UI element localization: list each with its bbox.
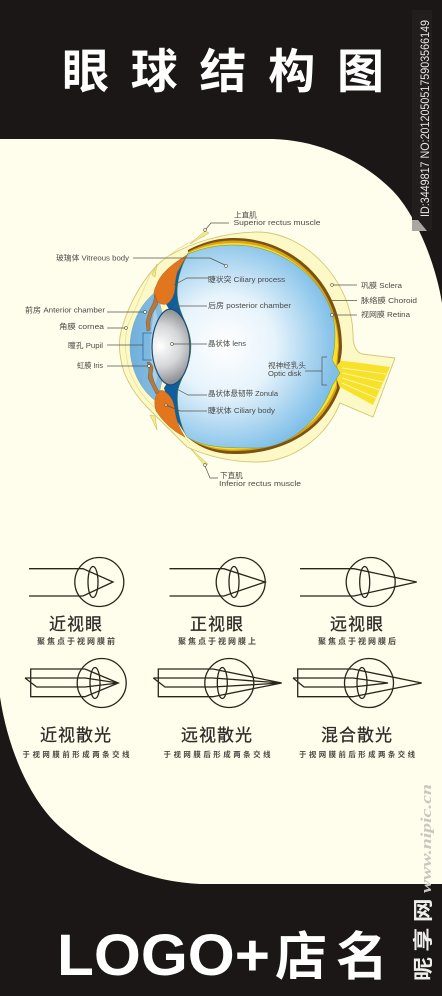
label: myopia: 近视眼	[49, 615, 103, 634]
choroid	[187, 238, 342, 454]
watermark url: www.nipic.cn	[419, 784, 435, 893]
muscles	[150, 231, 209, 466]
label: iris	[77, 360, 150, 370]
watermark id box	[412, 10, 432, 231]
label: myopic astigmatism	[22, 726, 130, 759]
label: normal: 聚焦点于视网膜上	[178, 636, 256, 646]
label: cornea	[59, 321, 127, 331]
sclera	[119, 232, 395, 462]
label: optic disk: Optic disk	[268, 369, 302, 378]
diagram: myopia	[29, 558, 124, 606]
footer logo text: LOGO+	[57, 923, 270, 988]
diagram: hyperopia	[300, 558, 417, 606]
retina yellow	[187, 243, 338, 450]
label: choroid: 脉络膜 Choroid	[361, 295, 417, 305]
label: anterior chamber	[25, 305, 146, 315]
label: optic disk	[268, 360, 322, 378]
label: mixed astigmatism	[299, 726, 416, 759]
label: normal	[178, 615, 256, 646]
label: hyperopia: 远视眼	[330, 615, 384, 634]
label: posterior chamber: 后房 posterior chamber	[208, 300, 291, 310]
cornea	[130, 291, 170, 402]
label: normal: 正视眼	[190, 615, 244, 634]
label: hyperopic astigmatism	[164, 726, 271, 759]
diagram: mixed astigmatism	[293, 658, 422, 708]
label: superior rectus muscle: 上直肌	[234, 210, 257, 220]
label: posterior chamber	[174, 300, 291, 310]
label: inferior rectus muscle	[204, 464, 301, 488]
label: cornea: 角膜 cornea	[59, 321, 105, 331]
label: sclera	[331, 280, 403, 290]
retina gold	[187, 240, 339, 451]
label: myopia	[37, 615, 115, 646]
label: anterior chamber: 前房 Anterior chamber	[25, 305, 105, 315]
label: superior rectus muscle	[204, 210, 320, 231]
optic disk bracket	[322, 357, 327, 385]
label: ciliary process: 睫状突 Ciliary process	[208, 274, 285, 284]
diagram: hyperopic astigmatism	[153, 658, 282, 708]
footer logo text: 店名	[275, 929, 388, 987]
label: lens	[171, 338, 246, 348]
footer logo text	[57, 923, 388, 988]
pupil bracket	[143, 333, 152, 360]
label: superior rectus muscle: Superior rectus muscle	[234, 218, 320, 227]
label: pupil	[68, 340, 143, 350]
label: choroid	[332, 295, 417, 305]
label: ciliary process	[174, 274, 285, 285]
label: sclera: 巩膜 Sclera	[361, 280, 403, 290]
label: hyperopic astigmatism: 远视散光	[181, 726, 253, 745]
label: mixed astigmatism: 混合散光	[321, 726, 393, 745]
ciliary body lower	[155, 390, 185, 437]
watermark brand: 昵享网	[412, 898, 435, 981]
cream panel	[0, 139, 442, 884]
diagram: myopic astigmatism	[25, 658, 126, 708]
diagram: normal vision	[170, 558, 265, 606]
label: hyperopic astigmatism: 于视网膜后形成两条交线	[164, 750, 271, 759]
label: hyperopia	[318, 615, 396, 646]
label: zonula	[175, 388, 279, 398]
label: pupil: 瞳孔 Pupil	[68, 340, 103, 350]
watermark id box: ID:3449817 NO:20120505175903566149	[420, 20, 432, 217]
label: optic disk: 视神经乳头	[268, 360, 306, 370]
vitreous body	[177, 245, 340, 448]
label: lens: 晶状体 lens	[208, 338, 246, 348]
label: ciliary body: 睫状体 Ciliary body	[208, 405, 275, 415]
label: inferior rectus muscle: 下直肌	[220, 470, 243, 480]
iris	[146, 295, 159, 394]
label: ciliary body	[165, 404, 275, 415]
lens	[152, 309, 190, 385]
title: 眼球结构图	[62, 45, 384, 98]
label: retina: 视网膜 Retina	[361, 309, 411, 319]
label: vitreous body	[56, 252, 227, 267]
label: inferior rectus muscle: Inferior rectus muscle	[219, 479, 301, 488]
anterior chamber	[150, 308, 165, 386]
label: myopic astigmatism: 近视散光	[40, 726, 112, 745]
sclera inner line	[125, 236, 205, 443]
optic nerve	[331, 360, 390, 405]
label: iris: 虹膜 Iris	[77, 360, 103, 370]
label: zonula: 晶状体悬韧带 Zonula	[208, 388, 279, 398]
eye diagram	[119, 231, 395, 466]
label: myopia: 聚焦点于视网膜前	[37, 636, 115, 646]
ciliary body orange	[154, 255, 187, 304]
zonula dark blue	[164, 253, 205, 437]
label: myopic astigmatism: 于视网膜前形成两条交线	[22, 750, 130, 759]
label: retina	[331, 309, 411, 319]
label: vitreous body: 玻璃体 Vitreous body	[56, 252, 129, 262]
label: hyperopia: 聚焦点于视网膜后	[318, 636, 396, 646]
label: mixed astigmatism: 于视网膜前后形成两条交线	[299, 750, 416, 759]
